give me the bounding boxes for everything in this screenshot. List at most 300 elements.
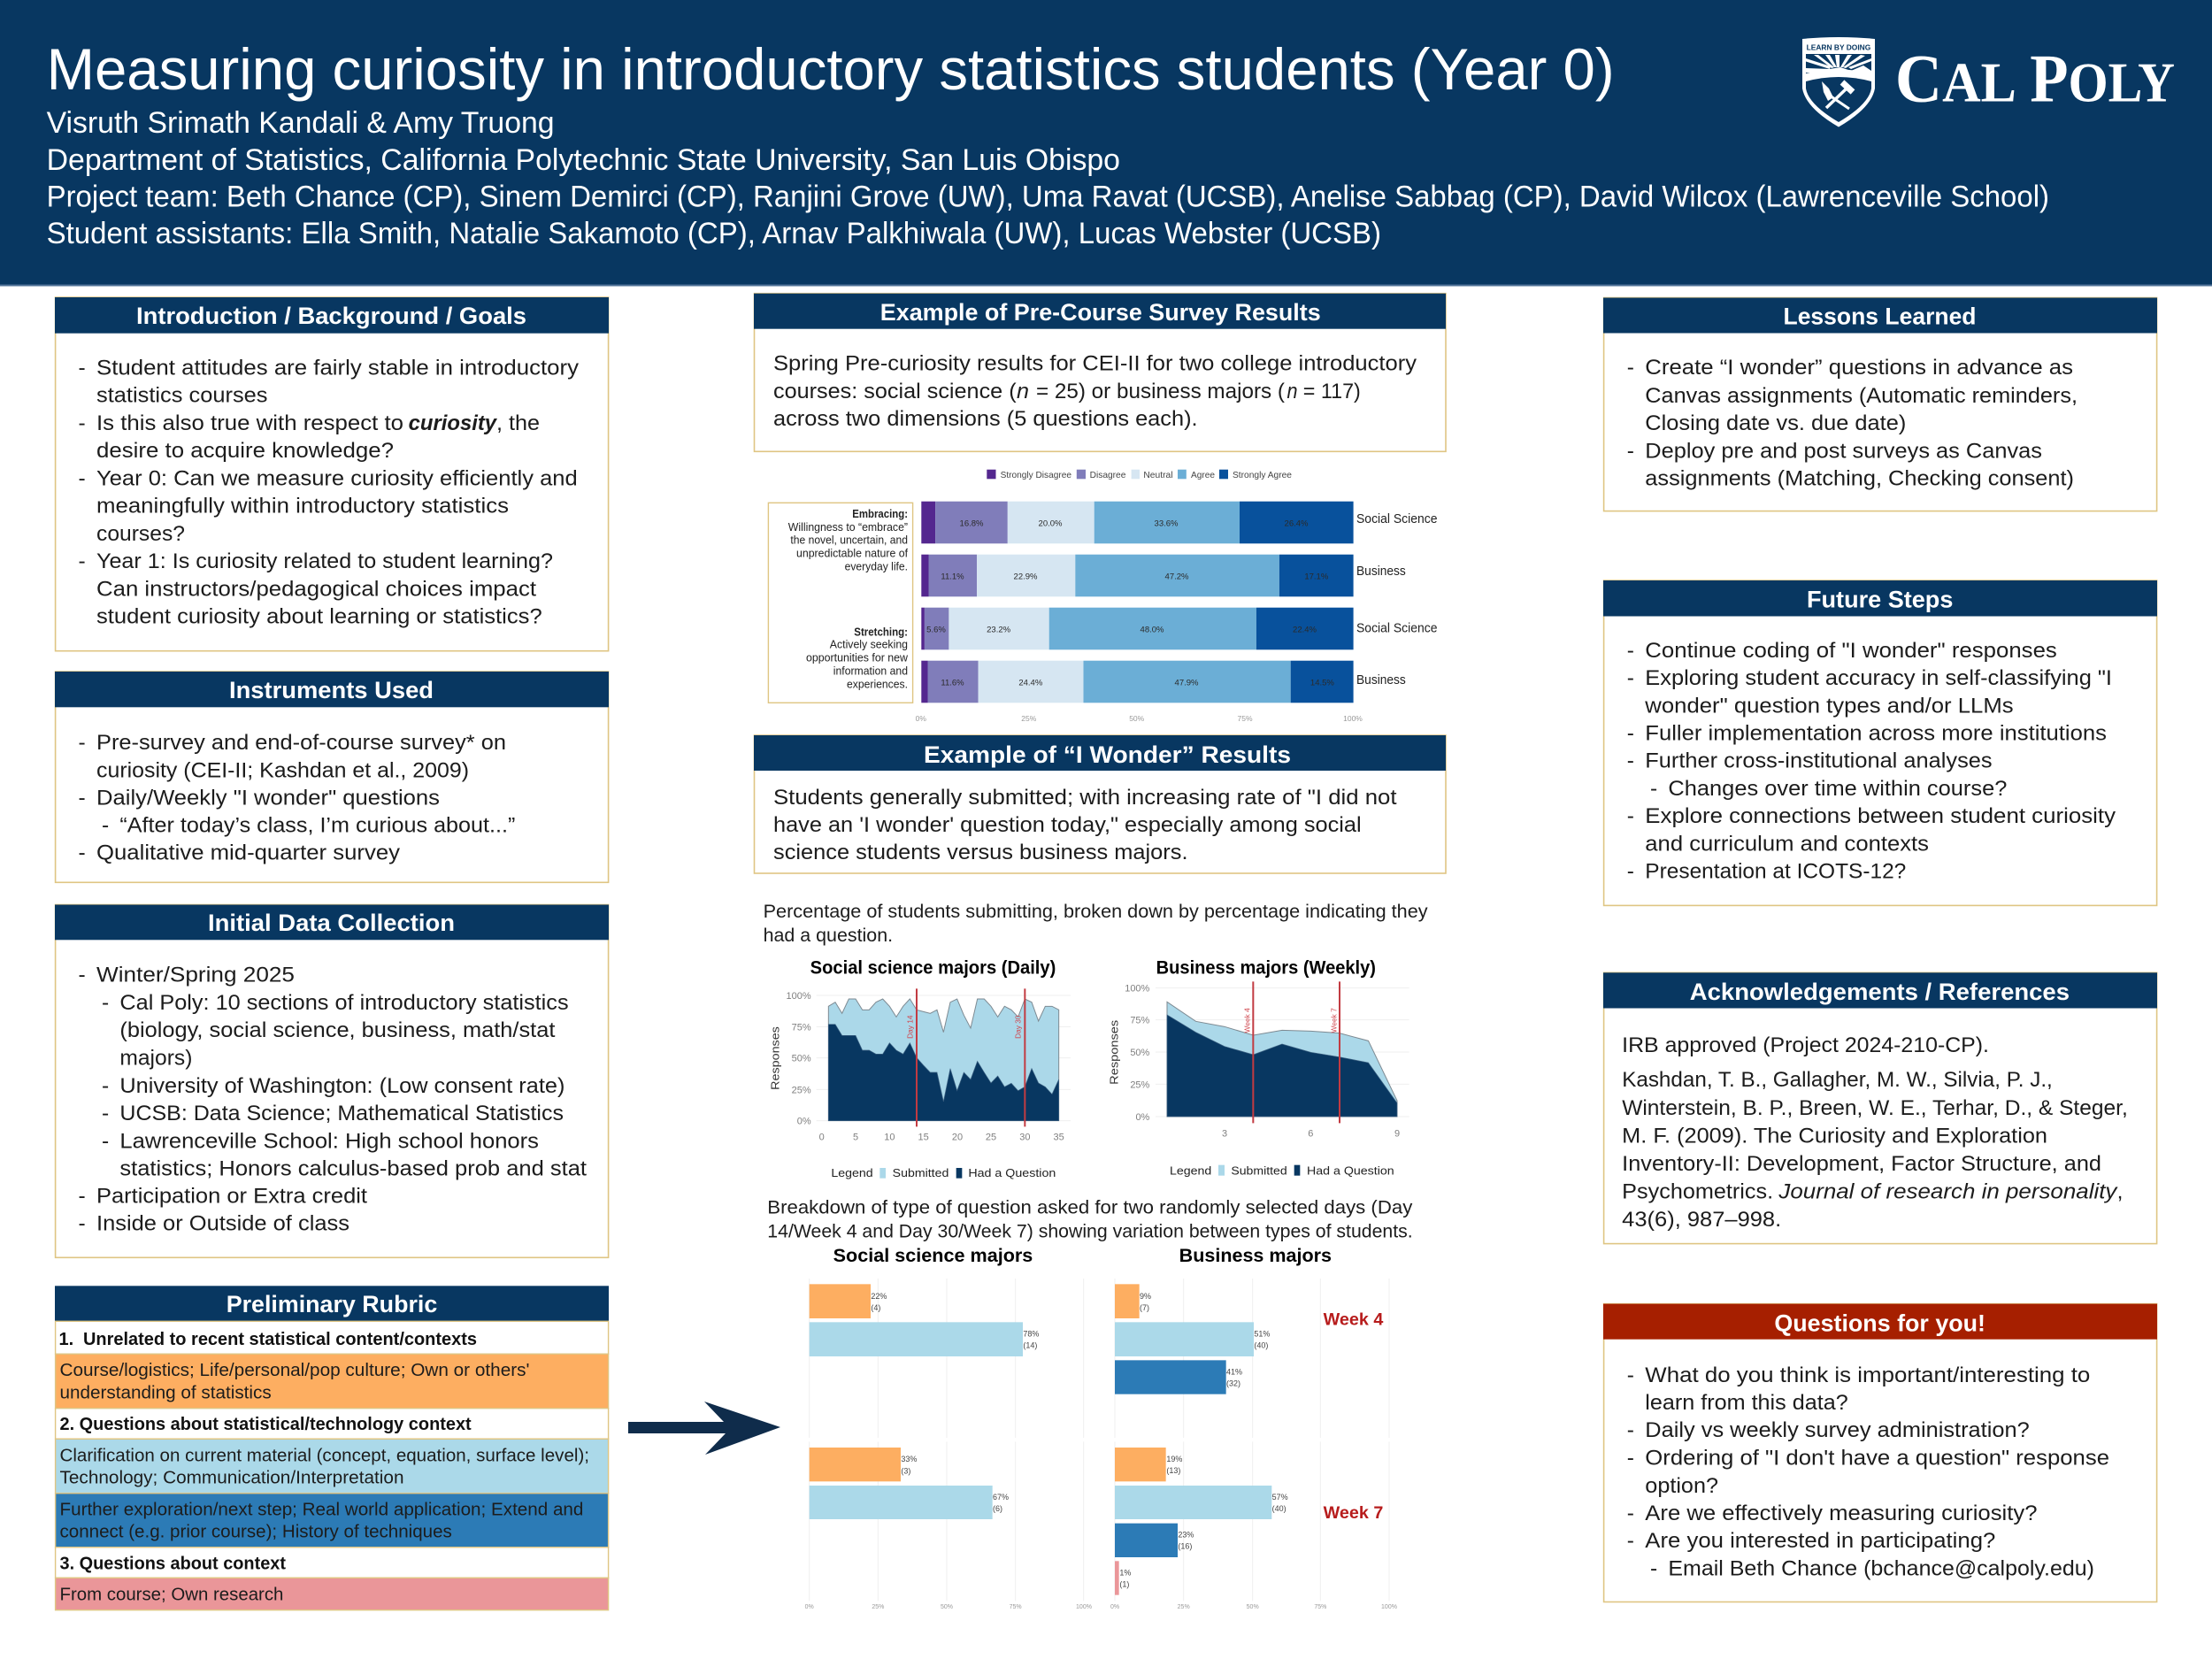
rubric row: category 2: [56, 1409, 609, 1439]
marker: week 4: Week 4: [1243, 1008, 1252, 1033]
logo: Cal Poly wordmark: [1895, 40, 2175, 116]
bar: Stretching business: 11.6%: [941, 678, 964, 688]
text: future steps bullets: -: [1650, 777, 1657, 801]
text: questions bullets: What do you think is important/interesting to: [1645, 1363, 2090, 1387]
bar: Embracing social science: 26.4%: [1285, 518, 1309, 529]
text: questions bullets: -: [1627, 1418, 1634, 1442]
x axis: percent: 25%: [1021, 714, 1037, 723]
rubric row: category 3: 3. Questions about context: [60, 1554, 286, 1573]
y axis: [1107, 984, 1150, 1123]
bars: week 7: 1%: [1119, 1568, 1131, 1577]
rubric row: light blue codes: Clarification on current material (concept, equation, surface level);: [60, 1447, 589, 1466]
legend: Submitted: [1231, 1164, 1287, 1178]
text: IRB approval: IRB approved (Project 2024-210-CP).: [1622, 1033, 1989, 1057]
bar group labels: Business: [1356, 673, 1406, 687]
text: reference citation: Inventory-II: Development, Factor Structure, and: [1622, 1152, 2101, 1176]
x axis: 0: [819, 1132, 825, 1142]
text: questions bullets: -: [1627, 1529, 1634, 1553]
bars: week 4: [810, 1284, 1039, 1356]
text: data collection bullets: Inside or Outside of class: [96, 1212, 349, 1236]
text: lessons bullets: Create “I wonder” questions in advance as: [1645, 356, 2073, 380]
heading: future steps: [1603, 580, 2157, 616]
text: pre-course description: n: [1017, 380, 1029, 403]
x axis: [1222, 1128, 1400, 1139]
bars: week 4: (4): [871, 1303, 880, 1312]
bar: Stretching social science: [921, 608, 1354, 649]
caption: question type breakdown: [767, 1196, 1413, 1241]
text: pre-course description: across two dimensions (5 questions each).: [773, 407, 1198, 431]
text: future steps bullets: -: [1627, 666, 1634, 690]
x axis: 35: [1054, 1132, 1064, 1142]
bar: Embracing social science: 16.8%: [960, 518, 984, 529]
bar: Embracing social science: [921, 502, 1354, 543]
bars: week 4: 51%: [1254, 1330, 1270, 1339]
text: lessons bullets: [1627, 356, 2078, 491]
text: reference citation: 43(6), 987–998.: [1622, 1208, 1781, 1232]
panel: lessons learned: [1603, 297, 2157, 511]
x axis: 25%: [872, 1604, 884, 1610]
heading: rubric: Preliminary Rubric: [227, 1291, 437, 1317]
bar group labels: Social Science: [1356, 512, 1437, 526]
text: pre-course description: courses: social science (: [773, 380, 1017, 403]
x axis: 3: [1222, 1128, 1227, 1139]
authors and team: Project team: Beth Chance (CP), Sinem Demirci (CP), Ranjini Grove (UW), Uma Ravat (UCSB), Anelise Sabbag (CP), David Wilcox (Lawrenceville School): [47, 180, 2049, 214]
y axis: 50%: [1130, 1048, 1150, 1058]
text: introduction bullets: Is this also true with respect to: [96, 411, 403, 435]
bars: week 4: (32): [1226, 1379, 1240, 1387]
text: future steps bullets: -: [1627, 639, 1634, 663]
bars: week 7: (6): [993, 1504, 1002, 1513]
text: questions bullets: learn from this data?: [1645, 1391, 1848, 1415]
text: instruments bullets: “After today’s class, I’m curious about...”: [119, 813, 515, 837]
heading: lessons: [1603, 297, 2157, 333]
bars: week 7: 19%: [1166, 1455, 1182, 1463]
title: Measuring curiosity in introductory statistics students (Year 0): [47, 36, 1615, 102]
bar: Stretching business: [921, 661, 1354, 703]
text: introduction bullets: , the: [496, 411, 540, 435]
marker: day 30: Day 30: [1014, 1015, 1023, 1039]
text: data collection bullets: University of Washington: (Low consent rate): [119, 1074, 565, 1098]
callout: dimension definitions: unpredictable nature of: [796, 548, 909, 560]
bars: week 7: (3): [901, 1466, 910, 1475]
heading: acknowledgements: [1603, 972, 2157, 1009]
x axis: [805, 1604, 1092, 1610]
text: questions bullets: Are you interested in participating?: [1645, 1529, 1995, 1553]
x axis: percent: 100%: [1343, 714, 1363, 723]
bar group labels: Business: [1356, 565, 1406, 579]
text: pre-course description: = 117): [1303, 380, 1361, 403]
text: introduction bullets: Can instructors/pedagogical choices impact: [96, 577, 536, 601]
text: pre-course description: n: [1286, 380, 1297, 403]
text: data collection bullets: Participation or Extra credit: [96, 1185, 367, 1209]
text: future steps bullets: Continue coding of "I wonder" responses: [1645, 639, 2057, 663]
text: future steps bullets: Exploring student accuracy in self-classifying "I: [1645, 666, 2112, 690]
x axis: 10: [884, 1132, 895, 1142]
y axis: 75%: [1130, 1016, 1150, 1026]
area: submitted: [1167, 1002, 1397, 1117]
text: data collection bullets: -: [78, 1212, 86, 1236]
bar: Stretching social science: 22.4%: [1293, 625, 1317, 635]
text: I wonder description: Students generally submitted; with increasing rate of "I did not: [773, 786, 1397, 810]
text: pre-course description: [773, 352, 1417, 431]
y axis: Responses: [1107, 1019, 1120, 1085]
callout: dimension definitions: opportunities for new: [806, 652, 909, 664]
text: instruments bullets: Pre-survey and end-of-course survey* on: [96, 731, 506, 755]
heading: future steps: Future Steps: [1807, 586, 1953, 612]
heading: questions: Questions for you!: [1774, 1310, 1985, 1336]
text: data collection bullets: Cal Poly: 10 sections of introductory statistics: [119, 991, 569, 1015]
bar: Stretching social science: 23.2%: [987, 625, 1011, 635]
callout: dimension definitions: the novel, uncertain, and: [790, 534, 908, 547]
x axis: percent: 0%: [916, 714, 926, 723]
marker: week 7: Week 7: [1330, 1008, 1339, 1033]
authors and team: Visruth Srimath Kandali & Amy Truong: [47, 106, 555, 140]
x axis: 15: [918, 1132, 929, 1142]
text: questions bullets: Email Beth Chance (bchance@calpoly.edu): [1668, 1556, 2094, 1580]
legend: Likert scale: Strongly Agree: [1233, 470, 1292, 480]
text: introduction bullets: curiosity: [409, 411, 497, 435]
x axis: 0%: [805, 1604, 814, 1610]
chart title: Social science majors (Daily): [810, 958, 1056, 979]
area: had a question: [828, 1025, 1059, 1121]
text: data collection bullets: -: [78, 1185, 86, 1209]
x axis: percent: 75%: [1237, 714, 1253, 723]
heading: I wonder: Example of “I Wonder” Results: [924, 741, 1291, 768]
bars: week 4: 41%: [1226, 1367, 1242, 1376]
legend: Likert scale: Disagree: [1090, 470, 1126, 480]
rubric row: orange codes: understanding of statistics: [60, 1383, 272, 1402]
heading: introduction: [55, 297, 609, 334]
chart title: Business majors: [1179, 1246, 1332, 1266]
text: lessons bullets: Deploy pre and post surveys as Canvas: [1645, 439, 2042, 463]
bar group labels: Social Science: [1356, 621, 1437, 635]
heading: data collection: Initial Data Collection: [208, 910, 455, 936]
bars: week 4: [1115, 1284, 1270, 1394]
heading: questions: [1603, 1304, 2157, 1340]
bars: week 4: (40): [1254, 1341, 1268, 1350]
text: reference citation: Psychometrics.: [1622, 1180, 1773, 1204]
text: pre-course description: = 25) or business majors (: [1036, 380, 1286, 403]
bar: Embracing social science: 20.0%: [1039, 518, 1063, 529]
text: lessons bullets: -: [1627, 439, 1634, 463]
text: questions bullets: option?: [1645, 1474, 1718, 1498]
callout: dimension definitions: Willingness to “embrace”: [788, 521, 908, 534]
text: data collection bullets: statistics; Honors calculus-based prob and stat: [119, 1157, 587, 1181]
text: introduction bullets: Year 0: Can we measure curiosity efficiently and: [96, 466, 578, 490]
bar: Embracing business: 11.1%: [941, 572, 964, 582]
heading: acknowledgements: Acknowledgements / References: [1690, 979, 2070, 1005]
heading: pre-course survey: [754, 294, 1446, 329]
rubric row: category 1: Unrelated to recent statistical content/contexts: [83, 1330, 477, 1349]
caption: question type breakdown: Breakdown of type of question asked for two randomly selected days (Day: [767, 1196, 1413, 1217]
text: lessons bullets: Canvas assignments (Automatic reminders,: [1645, 384, 2078, 408]
logo: Cal Poly shield: LEARN BY DOING: [1807, 43, 1871, 52]
text: data collection bullets: -: [102, 1102, 109, 1125]
text: introduction bullets: -: [78, 549, 86, 573]
text: future steps bullets: Fuller implementation across more institutions: [1645, 722, 2107, 745]
text: questions bullets: Daily vs weekly survey administration?: [1645, 1418, 2030, 1442]
text: questions bullets: -: [1650, 1556, 1657, 1580]
text: instruments bullets: -: [78, 731, 86, 755]
rubric row: blue codes: [56, 1494, 609, 1548]
bar: Embracing business: 17.1%: [1304, 572, 1329, 582]
x axis: 5: [853, 1132, 858, 1142]
label: week 7: Week 7: [1324, 1504, 1383, 1523]
text: data collection bullets: Lawrenceville School: High school honors: [119, 1129, 539, 1153]
rubric row: pink codes: From course; Own research: [60, 1586, 283, 1605]
callout: dimension definitions: Embracing:: [852, 508, 908, 520]
bars: week 7: (1): [1119, 1580, 1129, 1589]
text: instruments bullets: -: [78, 786, 86, 810]
y axis: 75%: [792, 1022, 811, 1033]
rubric row: orange codes: [56, 1354, 609, 1409]
bar: Stretching social science: 48.0%: [1141, 625, 1164, 635]
bar group labels: [1356, 512, 1437, 687]
text: future steps bullets: Explore connections between student curiosity: [1645, 804, 2116, 828]
x axis: 30: [1019, 1132, 1030, 1142]
legend: Likert scale: Agree: [1191, 470, 1215, 480]
authors and team: Department of Statistics, California Polytechnic State University, San Luis Obispo: [47, 143, 1120, 177]
x axis: 50%: [941, 1604, 953, 1610]
rubric row: light blue codes: Technology; Communication/Interpretation: [60, 1469, 404, 1488]
authors and team: [47, 106, 2049, 250]
area: had a question: [1167, 1015, 1397, 1117]
heading: introduction: Introduction / Background / Goals: [136, 303, 526, 329]
text: I wonder description: [773, 786, 1397, 864]
text: instruments bullets: Qualitative mid-quarter survey: [96, 841, 401, 865]
heading: instruments: [55, 672, 609, 707]
text: instruments bullets: [78, 731, 515, 865]
bar: Stretching social science: 5.6%: [926, 625, 946, 635]
bar: Stretching business: 24.4%: [1018, 678, 1043, 688]
text: introduction bullets: meaningfully within introductory statistics: [96, 495, 509, 518]
rubric row: category 2: 2. Questions about statistical/technology context: [60, 1415, 472, 1434]
y axis: 100%: [1125, 984, 1150, 995]
bars: week 7: (13): [1166, 1466, 1180, 1475]
bars: week 7: (16): [1178, 1542, 1192, 1551]
text: introduction bullets: courses?: [96, 522, 185, 546]
heading: instruments: Instruments Used: [229, 677, 434, 703]
x axis: 75%: [1010, 1604, 1022, 1610]
x axis: 50%: [1247, 1604, 1259, 1610]
text: introduction bullets: [78, 356, 580, 629]
y axis: 25%: [1130, 1079, 1150, 1090]
text: instruments bullets: curiosity (CEI-II; Kashdan et al., 2009): [96, 758, 469, 782]
bars: week 7: 33%: [901, 1455, 917, 1463]
x axis: 20: [952, 1132, 963, 1142]
x axis: percent: [916, 714, 1363, 723]
text: data collection bullets: UCSB: Data Science; Mathematical Statistics: [119, 1102, 564, 1125]
bars: week 7: [1115, 1448, 1288, 1595]
panel: questions for you: [1603, 1304, 2157, 1601]
text: reference citation: [1622, 1068, 2128, 1232]
caption: submission charts: Percentage of students submitting, broken down by percentage indicating they: [764, 901, 1428, 922]
y axis: 0%: [797, 1117, 811, 1127]
text: future steps bullets: wonder" question types and/or LLMs: [1644, 694, 2014, 718]
text: introduction bullets: -: [78, 466, 86, 490]
text: data collection bullets: -: [102, 1129, 109, 1153]
text: reference citation: Journal of research in personality: [1778, 1180, 2118, 1204]
text: questions bullets: -: [1627, 1363, 1634, 1387]
text: questions bullets: Ordering of "I don't have a question" response: [1645, 1447, 2109, 1471]
x axis: [1110, 1604, 1397, 1610]
rubric row: orange codes: Course/logistics; Life/personal/pop culture; Own or others': [60, 1361, 529, 1380]
bar: Embracing business: 47.2%: [1165, 572, 1189, 582]
x axis: 100%: [1381, 1604, 1397, 1610]
logo: Cal Poly wordmark: CAL: [1895, 40, 2016, 116]
heading: rubric: [55, 1286, 609, 1321]
text: reference citation: Kashdan, T. B., Gallagher, M. W., Silvia, P. J.,: [1622, 1068, 2053, 1092]
label: week 4: Week 4: [1324, 1311, 1384, 1330]
x axis: percent: 50%: [1129, 714, 1145, 723]
text: lessons bullets: -: [1627, 356, 1634, 380]
authors and team: Student assistants: Ella Smith, Natalie Sakamoto (CP), Arnav Palkhiwala (UW), Lucas Webster (UCSB): [47, 217, 1381, 250]
text: introduction bullets: -: [78, 356, 86, 380]
text: future steps bullets: -: [1627, 860, 1634, 884]
text: data collection bullets: [78, 963, 587, 1236]
text: reference citation: M. F. (2009). The Curiosity and Exploration: [1622, 1124, 2047, 1148]
text: future steps bullets: Further cross-institutional analyses: [1645, 749, 1993, 773]
chart: social science daily area chart: [769, 958, 1071, 1179]
text: instruments bullets: Daily/Weekly "I wonder" questions: [96, 786, 440, 810]
text: introduction bullets: desire to acquire knowledge?: [96, 439, 394, 463]
callout: dimension definitions: everyday life.: [845, 560, 908, 572]
text: reference citation: Winterstein, B. P., Breen, W. E., Terhar, D., & Steger,: [1622, 1096, 2128, 1120]
caption: question type breakdown: 14/Week 4 and Day 30/Week 7) showing variation between types of students.: [767, 1220, 1413, 1241]
arrow: rubric to bar charts: [628, 1402, 780, 1455]
text: future steps bullets: Changes over time within course?: [1668, 777, 2007, 801]
text: introduction bullets: Student attitudes are fairly stable in introductory: [96, 356, 580, 380]
text: data collection bullets: majors): [119, 1046, 192, 1071]
text: data collection bullets: -: [102, 991, 109, 1015]
bars: week 4: (7): [1140, 1303, 1149, 1312]
legend: Submitted: [893, 1166, 949, 1179]
heading: data collection: [55, 904, 609, 940]
panel: pre-course survey results: [754, 294, 1446, 451]
text: questions bullets: [1627, 1363, 2109, 1580]
heading: I wonder: [754, 735, 1446, 771]
text: reference citation: ,: [2117, 1180, 2123, 1204]
text: questions bullets: Are we effectively measuring curiosity?: [1645, 1502, 2037, 1525]
bar: Stretching business: 47.9%: [1175, 678, 1199, 688]
chart: business weekly area chart: [1107, 958, 1409, 1178]
y axis: 50%: [792, 1054, 811, 1064]
bars: week 7: (40): [1272, 1504, 1286, 1513]
callout: dimension definitions: Actively seeking: [830, 639, 908, 651]
rubric row: category 1: [56, 1321, 609, 1354]
text: introduction bullets: statistics courses: [96, 384, 267, 408]
rubric row: category 3: [56, 1548, 609, 1578]
rubric row: category 1: 1.: [58, 1330, 73, 1349]
text: introduction bullets: student curiosity about learning or statistics?: [96, 605, 542, 629]
x axis: 0%: [1110, 1604, 1119, 1610]
panel: instruments used: [55, 672, 609, 882]
logo: Cal Poly wordmark: POLY: [2030, 40, 2175, 116]
caption: submission charts: had a question.: [764, 925, 893, 946]
y axis: 100%: [787, 991, 811, 1002]
bar: Embracing social science: 33.6%: [1155, 518, 1179, 529]
y axis: 0%: [1135, 1112, 1150, 1123]
x axis: 100%: [1076, 1604, 1092, 1610]
text: instruments bullets: -: [78, 841, 86, 865]
legend: [1170, 1164, 1394, 1178]
text: lessons bullets: Closing date vs. due date): [1645, 411, 1906, 435]
bars: week 7: [810, 1448, 1009, 1519]
bars: week 7: 67%: [993, 1493, 1009, 1502]
callout: dimension definitions: Stretching:: [854, 626, 908, 638]
text: lessons bullets: assignments (Matching, Checking consent): [1645, 467, 2074, 491]
chart: social science question types: [805, 1246, 1092, 1610]
callout: dimension definitions: information and: [833, 664, 908, 677]
text: future steps bullets: Presentation at ICOTS-12?: [1645, 860, 1906, 884]
bars: week 7: 23%: [1178, 1531, 1194, 1540]
y axis: [769, 991, 811, 1127]
legend: Likert scale: [987, 470, 1292, 480]
callout: dimension definitions: [768, 503, 913, 703]
callout: dimension definitions: experiences.: [847, 678, 908, 690]
text: future steps bullets: -: [1627, 722, 1634, 745]
chart: business question types: [1110, 1246, 1397, 1610]
text: data collection bullets: (biology, social science, business, math/stat: [119, 1018, 556, 1042]
rubric row: pink codes: [56, 1578, 609, 1610]
x axis: 9: [1394, 1128, 1400, 1139]
legend: Legend: [1170, 1164, 1211, 1178]
chart title: Social science majors: [833, 1246, 1033, 1266]
legend: Likert scale: Neutral: [1143, 470, 1173, 480]
bar: Embracing business: 22.9%: [1014, 572, 1038, 582]
header banner: [0, 0, 2212, 287]
bars: week 7: 57%: [1272, 1493, 1288, 1502]
x axis: 6: [1308, 1128, 1313, 1139]
text: I wonder description: have an 'I wonder' question today," especially among social: [773, 813, 1362, 837]
panel: future steps: [1603, 580, 2157, 905]
bars: week 4: (14): [1023, 1341, 1037, 1350]
bars: week 4: 78%: [1023, 1330, 1039, 1339]
text: questions bullets: -: [1627, 1502, 1634, 1525]
panel: acknowledgements and references: [1603, 972, 2157, 1244]
y axis: 25%: [792, 1085, 811, 1095]
y axis: Responses: [769, 1026, 782, 1090]
rubric row: light blue codes: [56, 1439, 609, 1494]
text: introduction bullets: -: [78, 411, 86, 435]
chart title: Business majors (Weekly): [1156, 958, 1376, 979]
text: future steps bullets: -: [1627, 804, 1634, 828]
heading: pre-course survey: Example of Pre-Course Survey Results: [880, 299, 1321, 326]
heading: lessons: Lessons Learned: [1784, 303, 1977, 329]
marker: day 14: Day 14: [905, 1015, 914, 1039]
area: submitted: [828, 999, 1059, 1121]
text: future steps bullets: -: [1627, 749, 1634, 773]
legend: Likert scale: Strongly Disagree: [1001, 470, 1071, 480]
legend: Had a Question: [968, 1166, 1056, 1179]
text: data collection bullets: -: [102, 1074, 109, 1098]
panel: initial data collection: [55, 904, 609, 1257]
panel: introduction: [55, 297, 609, 651]
x axis: 75%: [1314, 1604, 1326, 1610]
logo: Cal Poly shield: [1802, 37, 1875, 127]
legend: Legend: [831, 1166, 873, 1179]
x axis: [819, 1132, 1064, 1142]
legend: [831, 1166, 1056, 1179]
text: future steps bullets: [1627, 639, 2116, 884]
text: pre-course description: Spring Pre-curiosity results for CEI-II for two college introductory: [773, 352, 1417, 376]
text: introduction bullets: Year 1: Is curiosity related to student learning?: [96, 549, 553, 573]
text: I wonder description: science students versus business majors.: [773, 841, 1187, 864]
x axis: 25%: [1178, 1604, 1190, 1610]
bars: week 4: 9%: [1140, 1292, 1151, 1301]
text: data collection bullets: Winter/Spring 2025: [96, 963, 295, 987]
text: questions bullets: -: [1627, 1447, 1634, 1471]
